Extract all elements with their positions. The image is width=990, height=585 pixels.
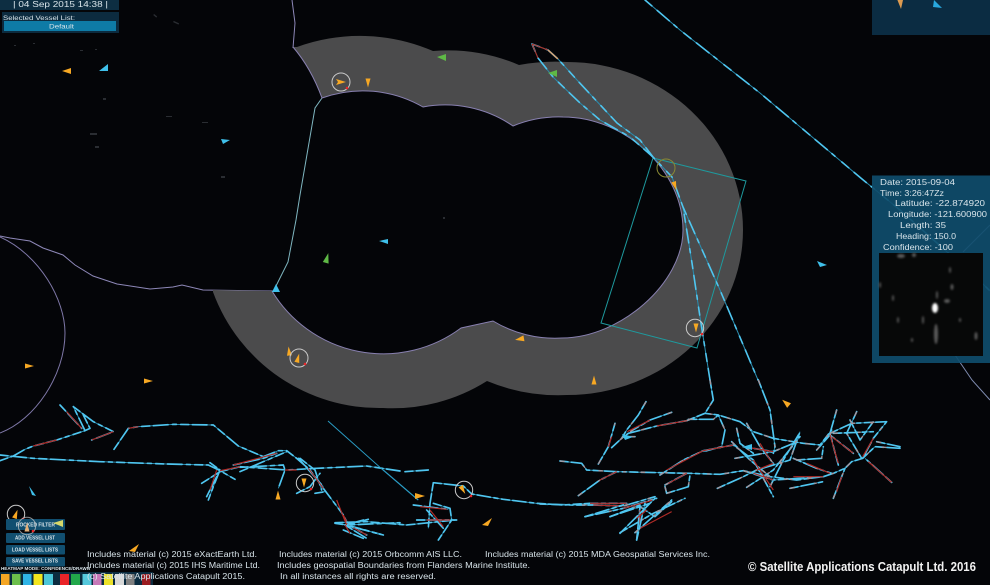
selected vessel list panel: Selected Vessel List: [3, 15, 75, 22]
top-left date bar: | 04 Sep 2015 14:38 | [13, 0, 108, 9]
vessel tracks: western cluster [0, 405, 400, 538]
default list button: Default [49, 24, 74, 30]
selected vessel list panel [2, 12, 119, 33]
data attribution text: Includes material (c) 2015 MDA Geospatial Services Inc. [485, 550, 710, 559]
bottom-left control buttons [6, 519, 65, 566]
detection metadata text: Latitude: -22.874920 [895, 199, 986, 208]
heatmap colour swatches [0, 572, 153, 585]
purple inner edge of protected area [272, 47, 683, 354]
vessel markers: orange [12, 68, 791, 552]
detection metadata text [880, 178, 988, 252]
detection metadata text: Heading: 150.0 [896, 232, 957, 241]
routes filter button: ROCKED FILTER [16, 522, 55, 528]
vessel markers: green [323, 54, 557, 264]
faint sensor specks [14, 14, 445, 219]
vessel tracks: transit across protected area [532, 44, 758, 380]
detection metadata text: Length: 35 [900, 221, 947, 230]
heatmap mode label: HEATMAP MODE: CONFIDENCE/DRAWN [1, 566, 91, 572]
vessel tracks: long straight transit [645, 0, 990, 291]
purple boundary: northern EEZ edge [0, 0, 295, 291]
satellite image footprint rectangle [601, 158, 746, 348]
detection metadata text: Date: 2015-09-04 [880, 178, 956, 187]
markers overlapping the control buttons [18, 517, 63, 535]
teal boundary line between zones [275, 98, 322, 288]
vessel tracks: eastern cluster [540, 380, 900, 540]
grey marine protected area band [213, 36, 743, 408]
detection details panel [872, 176, 990, 363]
thin single transit to central cluster [328, 421, 418, 500]
data attribution text: Includes material (c) 2015 IHS Maritime Ltd. [87, 561, 260, 570]
selected detection ring [657, 159, 675, 177]
purple coastline boundary: left arc [0, 237, 65, 433]
top-left date bar [0, 0, 119, 10]
detection metadata text: Longitude: -121.600900 [888, 210, 988, 219]
top-right panel [872, 0, 990, 35]
save vessel lists button: SAVE VESSEL LISTS [12, 558, 59, 564]
add vessel list button: ADD VESSEL LIST [15, 536, 55, 542]
data attribution text: Includes geospatial Boundaries from Flanders Marine Institute. [277, 561, 530, 570]
data attribution text: Includes material (c) 2015 Orbcomm AIS LLC. [279, 550, 462, 559]
data attribution text [87, 550, 710, 581]
SAR image chip [879, 253, 983, 356]
data attribution text: (c) Satellite Applications Catapult 2015. [87, 572, 245, 581]
highlighted vessel rings with alert dots [7, 73, 704, 523]
vessel tracks: central cluster [335, 470, 655, 540]
data attribution text: Includes material (c) 2015 eXactEarth Ltd. [87, 550, 257, 559]
detection metadata text: Confidence: -100 [883, 243, 954, 252]
right edge boundary arc [955, 225, 990, 400]
vessel markers: cyan [29, 64, 827, 496]
detection metadata text: Time: 3:26:47Zz [880, 189, 944, 198]
data attribution text: In all instances all rights are reserved. [280, 572, 436, 581]
load vessel lists button: LOAD VESSEL LISTS [12, 548, 59, 554]
